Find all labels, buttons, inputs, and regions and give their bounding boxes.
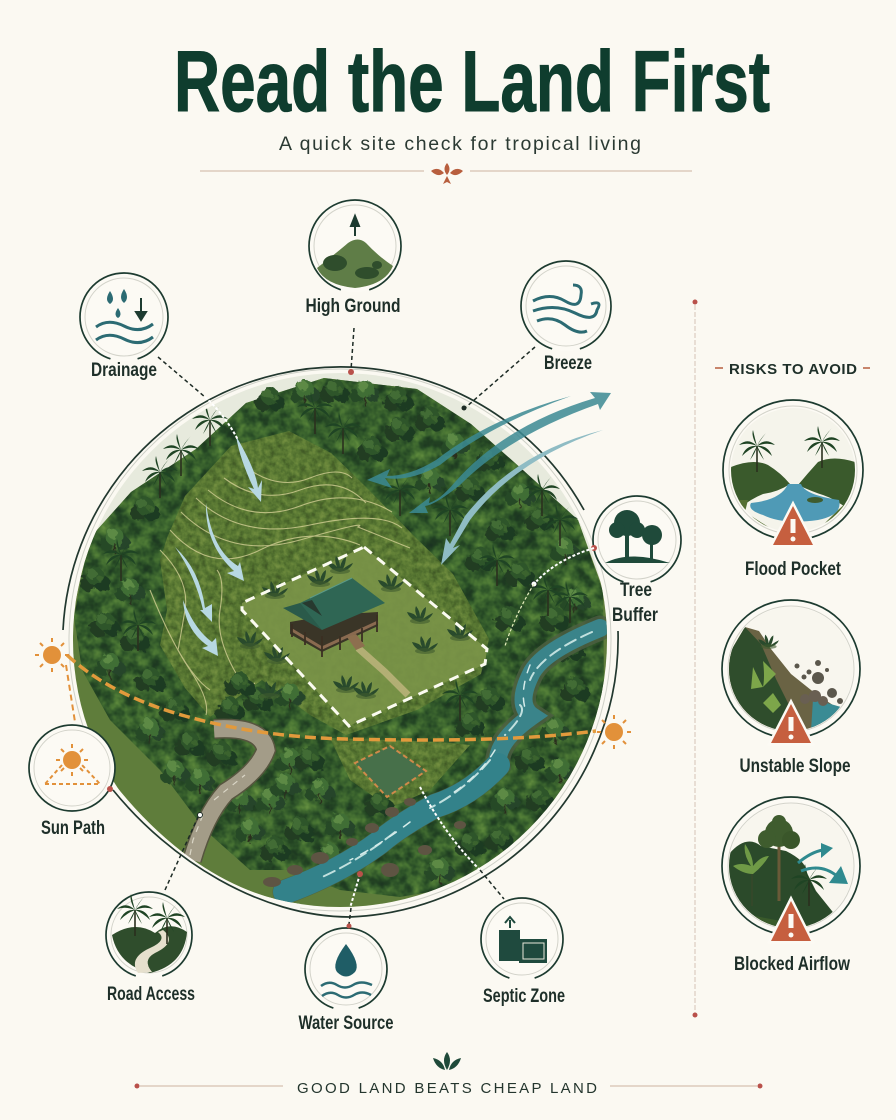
callout: tree buffer xyxy=(505,496,681,646)
callout: breeze: Breeze xyxy=(544,353,592,374)
risk: flood pocket: Flood Pocket xyxy=(745,559,842,580)
callout: septic zone: Septic Zone xyxy=(483,986,565,1007)
aerial land image xyxy=(60,370,620,920)
callout: tree buffer: Tree xyxy=(620,580,652,601)
breeze arrows xyxy=(367,392,611,565)
river xyxy=(285,628,600,892)
risk: unstable slope xyxy=(722,600,860,777)
risk: blocked airflow: Blocked Airflow xyxy=(734,954,850,975)
vertical divider xyxy=(692,300,698,1018)
risk: blocked airflow xyxy=(722,797,860,975)
river rocks xyxy=(263,798,466,887)
sun left xyxy=(35,638,69,672)
palms xyxy=(103,392,588,721)
hillside terraces xyxy=(160,431,489,735)
title divider ornament xyxy=(200,163,692,184)
callout: water source: Water Source xyxy=(298,1013,394,1034)
risk: unstable slope: Unstable Slope xyxy=(740,756,850,777)
footer tagline: GOOD LAND BEATS CHEAP LAND xyxy=(297,1080,597,1097)
callout: drainage xyxy=(80,273,238,440)
map outer ring xyxy=(63,367,618,917)
shrubs xyxy=(237,556,473,699)
panel: site map xyxy=(35,367,631,920)
risks heading: RISKS TO AVOID xyxy=(729,361,857,378)
map edge trim xyxy=(95,765,300,908)
panel: risks to avoid xyxy=(692,300,870,1018)
footer rules xyxy=(134,1084,762,1088)
sun right xyxy=(597,715,631,749)
footer ornament xyxy=(433,1052,461,1070)
grass base xyxy=(60,378,610,920)
road xyxy=(190,729,266,860)
lower clearing xyxy=(330,738,470,808)
callout: sun path xyxy=(29,725,115,839)
callout: high ground: High Ground xyxy=(306,296,400,317)
callout: road access: Road Access xyxy=(107,984,195,1005)
sun to icon dashed link xyxy=(66,665,75,722)
buildable area boundary xyxy=(242,547,487,726)
callout: high ground xyxy=(306,200,401,375)
map inner ring xyxy=(69,369,611,911)
callout: drainage: Drainage xyxy=(91,360,157,381)
callout: water source xyxy=(298,871,394,1034)
sun path line xyxy=(67,655,596,740)
callout: septic zone xyxy=(420,787,565,1007)
risk: flood pocket xyxy=(723,400,863,580)
callout: breeze xyxy=(462,261,611,410)
callout: sun path: Sun Path xyxy=(41,818,105,839)
trees xyxy=(80,379,590,884)
terrace contour lines xyxy=(150,470,410,715)
callout: tree buffer: Buffer xyxy=(612,605,658,626)
house xyxy=(283,578,385,657)
footpath xyxy=(358,648,408,695)
house clearing xyxy=(242,547,487,726)
callout: road access xyxy=(106,812,202,1005)
forest canopy xyxy=(74,378,604,897)
septic zone plot xyxy=(355,746,426,797)
drainage flow arrows xyxy=(175,436,262,656)
subtitle: A quick site check for tropical living xyxy=(279,133,641,155)
